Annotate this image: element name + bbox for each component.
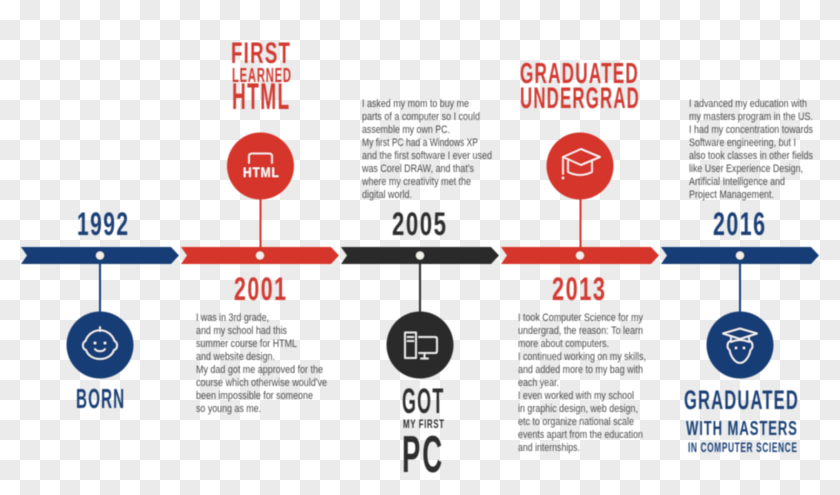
text block: 2005 story	[361, 98, 492, 201]
timeline dot	[576, 252, 584, 260]
year 2016: 2016	[713, 206, 766, 242]
year 2013: 2013	[552, 271, 606, 307]
text block: 2016 story	[689, 98, 813, 201]
heading: first learned html: HTML	[232, 76, 290, 117]
heading: got my first pc: GOT	[402, 382, 444, 421]
heading: got my first pc: MY FIRST	[403, 417, 444, 431]
heading: got my first pc: PC	[402, 426, 444, 484]
connector line	[419, 255, 421, 313]
text block: 2013 story	[518, 312, 646, 454]
icon: desktop computer	[386, 312, 454, 378]
arrow segment: black	[341, 247, 499, 264]
heading: first learned html	[231, 37, 292, 117]
text block: 2005 story: where my creativity met the	[361, 176, 471, 188]
arrow segment: red	[501, 247, 659, 264]
icon: html: HTML	[243, 164, 280, 180]
text block: 2013 story: I took Computer Science for my	[518, 312, 643, 324]
milestone 2001: first learned html	[181, 37, 339, 415]
year 2005: 2005	[392, 206, 448, 242]
text block: 2016 story: Project Management.	[689, 189, 774, 201]
icon: html	[227, 132, 294, 200]
heading: got my first pc	[402, 382, 444, 484]
text block: 2005 story: I asked my mom to buy me	[362, 98, 469, 110]
text block: 2013 story: in graphic design, web design,	[518, 403, 638, 415]
text block: 2013 story: undergrad, the reason: To learn	[518, 325, 643, 337]
text block: 2016 story: my masters program in the US.	[689, 111, 813, 123]
heading: first learned html: LEARNED	[232, 65, 292, 87]
text block: 2016 story: Software engineering, but I	[689, 137, 796, 149]
text block: 2001 story: and website design.	[196, 351, 275, 363]
text block: 2001 story: summer course for HTML	[196, 338, 297, 350]
timeline dot	[416, 252, 424, 260]
text block: 2005 story: My first PC had a Windows XP	[362, 137, 478, 149]
text block: 2005 story: and the first software I ever used	[362, 150, 492, 162]
text block: 2001 story: been impossible for someone	[196, 390, 313, 402]
text block: 2013 story: each year.	[518, 377, 559, 389]
year 2001: 2001	[234, 271, 288, 307]
arrow segment: red	[181, 247, 339, 264]
icon: baby face	[66, 312, 134, 378]
timeline dot	[256, 252, 264, 260]
text block: 2001 story: and my school had this	[196, 325, 287, 337]
text block: 2013 story: I even worked with my school	[518, 390, 634, 402]
text block: 2013 story: more about computers.	[518, 338, 609, 350]
text block: 2005 story: parts of a computer so I could	[362, 111, 480, 123]
text block: 2013 story: etc to organize national scale	[518, 416, 634, 428]
text block: 2005 story: was Corel DRAW, and that's	[361, 163, 474, 175]
milestone 2016: graduated with masters	[661, 98, 819, 455]
text block: 2016 story: like User Experience Design,	[689, 163, 803, 175]
timeline dot	[96, 252, 104, 260]
connector line	[99, 255, 101, 313]
text block: 2001 story	[196, 312, 327, 415]
icon: graduate with cap	[706, 312, 774, 378]
arrow segment: blue	[661, 247, 819, 264]
heading: graduated with masters in computer science	[684, 385, 799, 455]
milestone 2005: got my first pc	[341, 98, 499, 484]
text block: 2001 story: My dad got me approved for the	[196, 364, 323, 376]
heading: graduated undergrad	[520, 58, 640, 115]
year 1992: 1992	[77, 206, 130, 242]
text block: 2013 story: and added more to my bag with	[518, 364, 643, 376]
connector line	[260, 199, 262, 255]
heading: graduated undergrad: GRADUATED	[520, 58, 639, 90]
connector line	[580, 199, 582, 255]
text block: 2001 story: I was in 3rd grade,	[196, 312, 269, 324]
text block: 2013 story: and internships.	[518, 442, 580, 454]
heading: first learned html: FIRST	[231, 37, 291, 70]
text block: 2016 story: I advanced my education with	[689, 98, 807, 110]
text block: 2005 story: assemble my own PC.	[362, 124, 450, 136]
icon: graduation cap	[546, 132, 614, 200]
milestone 1992: born	[21, 206, 179, 414]
milestone 2013: graduated undergrad	[501, 58, 659, 454]
timeline dot	[736, 252, 744, 260]
text block: 2001 story: so young as me.	[196, 403, 261, 415]
label: born: BORN	[76, 383, 125, 414]
text block: 2016 story: Artificial Intelligence and	[689, 176, 785, 188]
heading: graduated undergrad: UNDERGRAD	[520, 82, 640, 115]
connector line	[739, 255, 741, 313]
text block: 2013 story: I continued working on my skills,	[518, 351, 646, 363]
text block: 2005 story: digital world.	[362, 189, 412, 201]
arrow segment: blue	[21, 247, 179, 264]
text block: 2013 story: events apart from the education	[518, 429, 643, 441]
text block: 2016 story: I had my concentration towards	[689, 124, 813, 136]
text block: 2001 story: course which otherwise would've	[196, 377, 327, 389]
text block: 2016 story: also took classes in other fields	[689, 150, 813, 162]
